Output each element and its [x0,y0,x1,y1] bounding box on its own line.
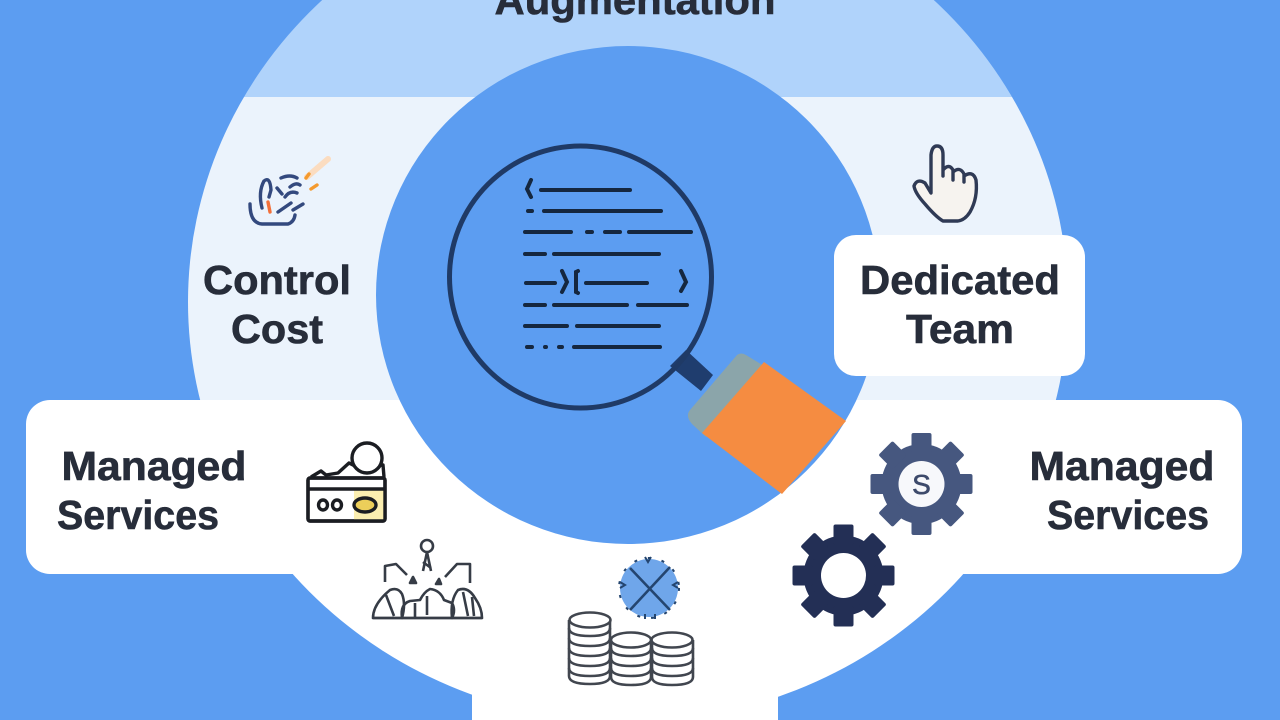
coin stack right [652,632,693,685]
magnifier grey collar [688,354,764,437]
label: Dedicated Team: Team [906,306,1014,352]
panel: Managed Services right card [742,400,1242,574]
panel: bottom tab [472,600,778,720]
magnifier handle connector [670,350,713,391]
icon: control cost sketch [250,159,328,224]
icon: dollar gear: S [912,469,931,500]
icon: magnifying glass with code [450,146,846,494]
panel: outer ring [180,0,1080,720]
magnifier orange handle [702,362,846,494]
label: Managed Services left: Managed [62,443,246,489]
code lines [525,180,691,347]
coin stack middle [611,632,651,685]
label: Dedicated Team [860,257,1060,352]
icon: gear [792,524,894,626]
label: Dedicated Team: Dedicated [860,257,1060,303]
panel: Dedicated Team card [834,235,1085,376]
label: Control Cost: Control [203,257,351,303]
label: Managed Services right: Managed [1030,443,1214,489]
icon: card with globe [308,443,385,521]
magnifier lens [450,146,712,408]
panel: Managed Services left card [26,400,526,574]
label: Managed Services left [57,443,246,538]
label: Control Cost: Cost [231,306,323,352]
icon: crossed circle [619,557,679,619]
label: Control Cost [203,257,351,352]
icon: people group [373,540,482,618]
label: Managed Services right [1030,443,1214,538]
icon: coin stacks [569,612,693,685]
panel: central circle [376,46,880,544]
label: Managed Services right: Services [1047,492,1209,538]
label: Managed Services left: Services [57,492,219,538]
coin stack left [569,612,610,684]
icon: dollar gear [870,433,972,535]
icon: pointing hand [914,146,976,221]
